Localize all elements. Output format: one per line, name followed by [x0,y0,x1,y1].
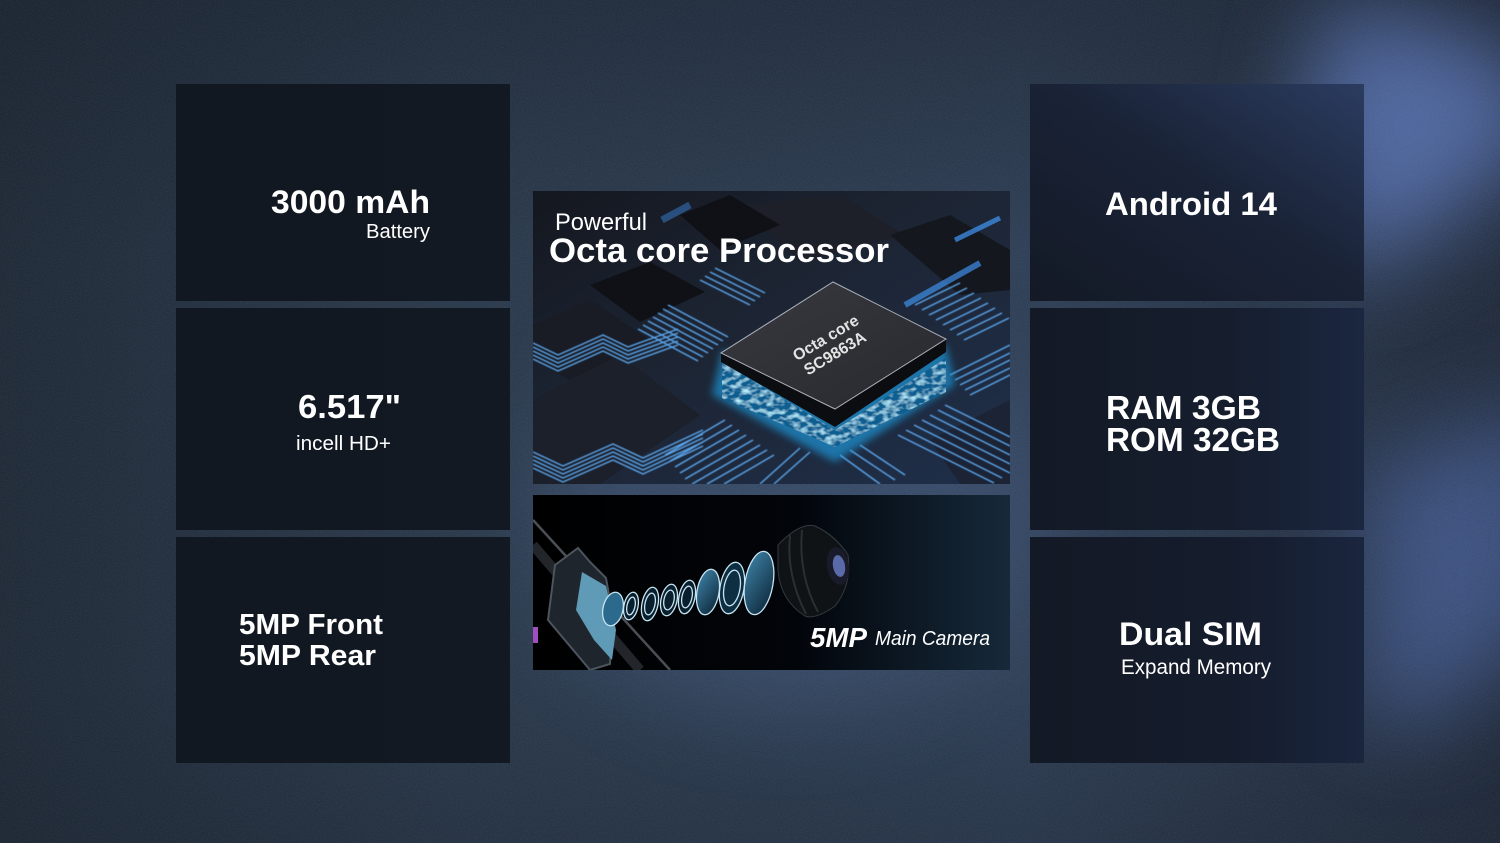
text: dual SIM expand memory: Expand Memory [1121,656,1271,679]
chip side glowing base [722,358,946,447]
chip label [794,318,867,374]
label: 5MP main camera: 5MP [810,622,867,653]
text: RAM and ROM: RAM 3GB [1106,389,1261,426]
label: 5MP main camera: Main Camera [875,628,990,650]
heading: processor: Powerful [555,209,647,236]
chip label: SC9863A [801,329,870,379]
text: 5MP front and rear [239,609,383,672]
text: 6.517 inch incell HD+: 6.517" [298,388,401,425]
text: Android 14: Android 14 [1105,186,1277,222]
processor chip [721,282,946,427]
text: 5MP front and rear: 5MP Rear [239,640,376,672]
panel: dual sim [1030,537,1364,763]
panel: front and rear camera [176,537,510,763]
chip label: Octa core [790,312,862,365]
circuit traces [533,268,1010,484]
heading: processor: Octa core Processor [549,232,889,270]
text: 3000 mAh battery [271,184,430,243]
chip glow [712,345,955,462]
camera module [533,520,670,670]
panel: android [1030,84,1364,301]
text: 6.517 inch incell HD+ [296,388,401,455]
panel: camera image [533,495,1010,670]
text: RAM and ROM [1106,389,1280,458]
panel: processor image [533,191,1010,484]
text: 5MP front and rear: 5MP Front [239,609,383,641]
circuit board blocks [533,195,1010,484]
text: 3000 mAh battery: 3000 mAh [271,184,430,220]
panel: battery [176,84,510,301]
lens elements [600,549,778,628]
text: dual SIM expand memory [1119,616,1271,679]
text: RAM and ROM: ROM 32GB [1106,421,1280,458]
blue highlights [662,205,1000,305]
panel: display [176,308,510,530]
text: 6.517 inch incell HD+: incell HD+ [296,433,391,455]
label: 5MP main camera [810,628,990,648]
panel: memory [1030,308,1364,530]
text: dual SIM expand memory: Dual SIM [1119,616,1262,652]
camera lens barrel [778,525,852,617]
text: 3000 mAh battery: Battery [366,221,430,243]
heading: processor [550,212,888,262]
